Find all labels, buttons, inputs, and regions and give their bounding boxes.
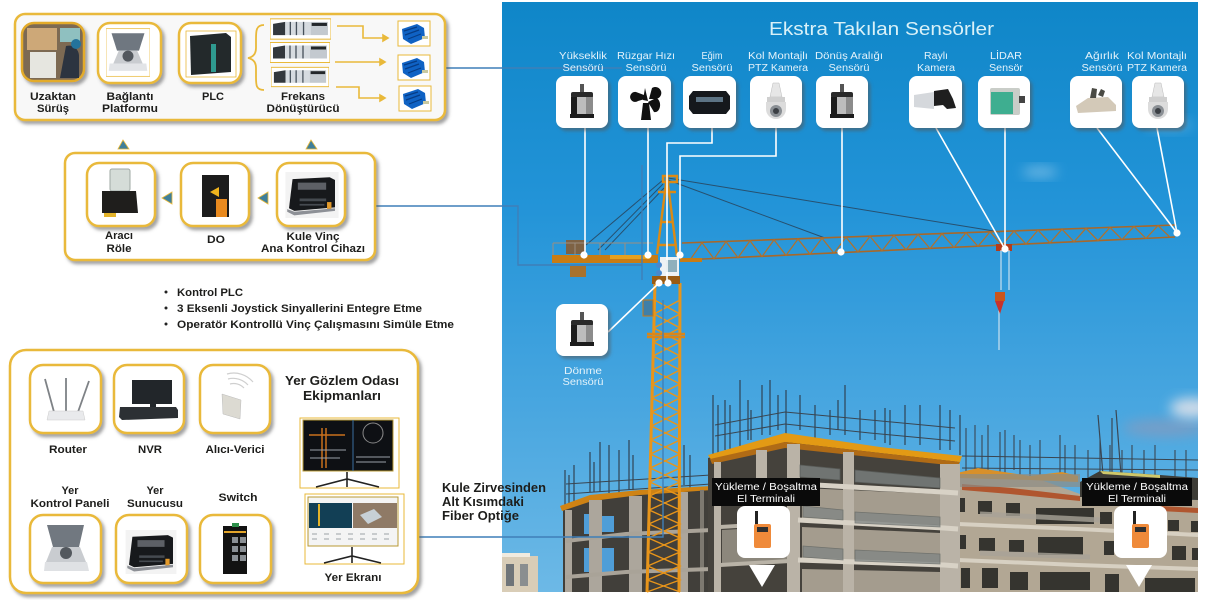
sensor: Kol Montajlı PTZ Kamera: [748, 51, 808, 128]
ties: [586, 178, 1000, 250]
panel: crane photo background: [502, 2, 1207, 592]
handheld terminal left: El Terminali: [737, 494, 795, 505]
sensor title: Ekstra Takılan Sensörler: [769, 19, 994, 39]
frequency converters: Frekans: [281, 91, 325, 103]
card: Alıcı-Verici: [200, 365, 270, 456]
buildings under construction: [502, 380, 1198, 592]
sensor: Kol Montajlı PTZ Kamera: PTZ Kamera: [748, 63, 808, 74]
crane: [552, 176, 1175, 592]
sensor: Kol Montajlı PTZ Kamera (2): PTZ Kamera: [1127, 63, 1187, 74]
sensor: Raylı Kamera: Raylı: [924, 51, 948, 62]
card: Ana Kontrol Cihazı: [261, 163, 365, 255]
card: Yer Kontrol Paneli: Kontrol Paneli: [30, 498, 110, 510]
heading: Yer Gözlem Odası: [285, 373, 399, 388]
hook trolley and hook: [996, 244, 1012, 251]
card: Alıcı-Verici: Alıcı-Verici: [206, 444, 264, 456]
sensor: Dönme Sensörü: [556, 304, 608, 388]
monitor: ground screen: [305, 494, 404, 564]
counter jib: [552, 255, 658, 263]
handheld terminal right: [1082, 478, 1192, 587]
sensor: Dönüş Aralığı Sensörü: Sensörü: [828, 63, 870, 74]
sensor: Rüzgar Hızı Sensörü: Rüzgar Hızı: [617, 51, 675, 62]
jib lattice: [682, 225, 1175, 260]
monitor: crane status: [300, 418, 399, 488]
card: Router: [30, 365, 101, 456]
heading: [285, 373, 399, 403]
tower mast: [647, 283, 685, 592]
panel: ground observation room equipment: [10, 350, 418, 593]
handheld terminal left: [712, 478, 820, 587]
left building: [563, 488, 712, 592]
sensor: Raylı Kamera: Kamera: [917, 63, 955, 74]
card: Switch: Switch: [218, 492, 258, 504]
tower head: [657, 176, 677, 256]
arrows up to remote panel: [118, 140, 317, 149]
blue connector lines: [375, 68, 663, 537]
sensor: Kol Montajlı PTZ Kamera (2): Kol Montajlı: [1127, 51, 1187, 62]
fiber optic note: Alt Kısımdaki: [442, 495, 524, 509]
heading: Ekipmanları: [303, 388, 381, 403]
sensor: Kol Montajlı PTZ Kamera (2): [1127, 51, 1187, 128]
card: Uzaktan Sürüş: Sürüş: [37, 103, 69, 115]
card: Router: Router: [49, 444, 88, 456]
arrow: [162, 192, 172, 204]
handheld terminal left: Yükleme / Boşaltma: [715, 482, 817, 493]
center building: [708, 438, 960, 592]
arrows to motors: [335, 26, 388, 101]
card: Yer Sunucusu: [116, 485, 187, 583]
sensor: Dönme Sensörü: Dönme: [564, 366, 603, 377]
card: Switch: [200, 492, 271, 583]
sensor: Dönüş Aralığı Sensörü: Dönüş Aralığı: [815, 51, 883, 62]
bullet list: [164, 287, 454, 331]
card: NVR: NVR: [138, 444, 162, 456]
sensor: Eğim Sensörü: Sensörü: [692, 63, 732, 74]
card: Bağlantı Platformu: [98, 23, 161, 115]
cab: [660, 257, 679, 276]
frequency converters: Dönüştürücü: [266, 103, 340, 115]
card: Yer Kontrol Paneli: [30, 485, 110, 583]
right building: [957, 472, 1198, 592]
sensor: Yükseklik Sensörü: Sensörü: [562, 63, 604, 74]
card: Ana Kontrol Cihazı: Ana Kontrol Cihazı: [261, 243, 365, 255]
sensor: Ağırlık Sensörü: Sensörü: [1082, 63, 1122, 74]
card: Ana Kontrol Cihazı: Kule Vinç: [286, 231, 340, 243]
bullet list: 3 Eksenli Joystick Sinyallerini Entegre Etme: [177, 303, 422, 315]
bullet list: Kontrol PLC: [177, 287, 243, 299]
sensor: Eğim Sensörü: Eğim: [702, 51, 722, 62]
sensor: Kol Montajlı PTZ Kamera: Kol Montajlı: [748, 51, 808, 62]
fiber optic note: Kule Zirvesinden: [442, 481, 546, 495]
rebar and railings: [565, 380, 960, 506]
card: Aracı Röle: [87, 163, 155, 255]
sensor leader lines: [580, 128, 1181, 332]
card: PLC: [179, 23, 241, 103]
sensor: Dönme Sensörü: Sensörü: [562, 377, 604, 388]
card: Yer Sunucusu: Yer: [146, 485, 164, 497]
sensor: Eğim Sensörü: [683, 51, 736, 128]
sensor: LİDAR Sensör: [978, 49, 1030, 128]
card: Uzaktan Sürüş: [22, 23, 84, 115]
sensor: Rüzgar Hızı Sensörü: Sensörü: [626, 63, 666, 74]
card: Aracı Röle: Aracı: [105, 230, 133, 242]
sensor: Rüzgar Hızı Sensörü: [617, 51, 675, 128]
sensor: LİDAR Sensör: Sensör: [989, 63, 1024, 74]
sensor: Raylı Kamera: [909, 51, 962, 128]
sensor: LİDAR Sensör: LİDAR: [990, 49, 1022, 62]
label: Yer Ekrani: Yer Ekranı: [324, 572, 382, 584]
sensor: Dönüş Aralığı Sensörü: [815, 51, 883, 128]
frequency converters: [266, 19, 340, 115]
sensor: Yükseklik Sensörü: [556, 51, 608, 128]
panel: remote driving chain: [15, 14, 445, 120]
sensor: Ağırlık Sensörü: [1070, 51, 1122, 128]
card: Yer Sunucusu: Sunucusu: [127, 498, 183, 510]
card: Uzaktan Sürüş: Uzaktan: [30, 91, 76, 103]
far left building: [502, 556, 538, 592]
card: DO: DO: [207, 234, 225, 246]
card: DO: [181, 163, 249, 246]
card: Bağlantı Platformu: Bağlantı: [106, 91, 154, 103]
fiber optic note: [442, 481, 546, 523]
card: Bağlantı Platformu: Platformu: [102, 103, 158, 115]
sensor: Ağırlık Sensörü: Ağırlık: [1085, 51, 1120, 62]
card: PLC: PLC: [202, 91, 224, 103]
sensor: Yükseklik Sensörü: Yükseklik: [559, 51, 608, 62]
card: NVR: [114, 365, 184, 456]
card: Yer Kontrol Paneli: Yer: [62, 485, 79, 497]
motors: [398, 21, 431, 111]
bracket: [248, 25, 264, 90]
handheld terminal right: El Terminali: [1108, 494, 1166, 505]
fiber optic note: Fiber Optiğe: [442, 509, 519, 523]
bullet list: Operatör Kontrollü Vinç Çalışmasını Simüle Etme: [177, 319, 454, 331]
handheld terminal right: Yükleme / Boşaltma: [1086, 482, 1188, 493]
arrow: [258, 192, 268, 204]
card: Aracı Röle: Röle: [106, 243, 132, 255]
panel: main controller chain: [65, 153, 375, 260]
